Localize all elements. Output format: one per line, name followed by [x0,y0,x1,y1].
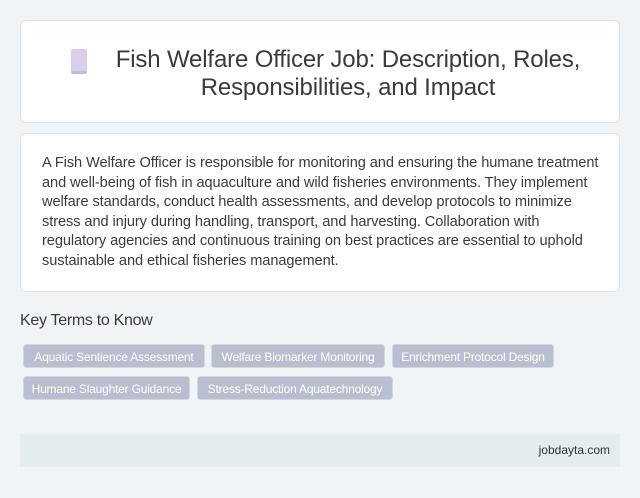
tag 2: Welfare Biomarker Monitoring [222,350,374,364]
description card [20,133,620,292]
description text: and well-being of fish in aquaculture and wild fisheries environments. They implement [42,175,587,191]
tag 3: Enrichment Protocol Design [401,350,545,364]
icon: scroll [71,49,87,74]
description text: regulatory agencies and continuous training on best practices are essential to uphold [42,233,583,249]
tag 4: Humane Slaughter Guidance [32,382,181,396]
tag 4 [23,376,190,400]
tag 2 [211,344,385,368]
tag 5 [197,376,393,400]
footer text: jobdayta.com [539,443,610,457]
title: Fish Welfare Officer Job: Description, Roles, [116,46,580,73]
description text [42,155,598,269]
title [116,46,580,101]
footer [20,434,620,467]
header card [20,20,620,123]
heading: key terms: Key Terms to Know [20,312,152,329]
description text: A Fish Welfare Officer is responsible for monitoring and ensuring the humane treatment [42,155,598,171]
description text: sustainable and ethical fisheries management. [42,253,339,269]
tag 3 [392,344,554,368]
title: Responsibilities, and Impact [201,74,495,101]
tag 1 [23,344,205,368]
tag 5: Stress-Reduction Aquatechnology [208,382,382,396]
description text: stress and injury during handling, transport, and harvesting. Collaboration with [42,214,539,230]
description text: welfare standards, conduct health assessments, and develop protocols to minimize [42,194,572,210]
tag 1: Aquatic Sentience Assessment [34,350,194,364]
